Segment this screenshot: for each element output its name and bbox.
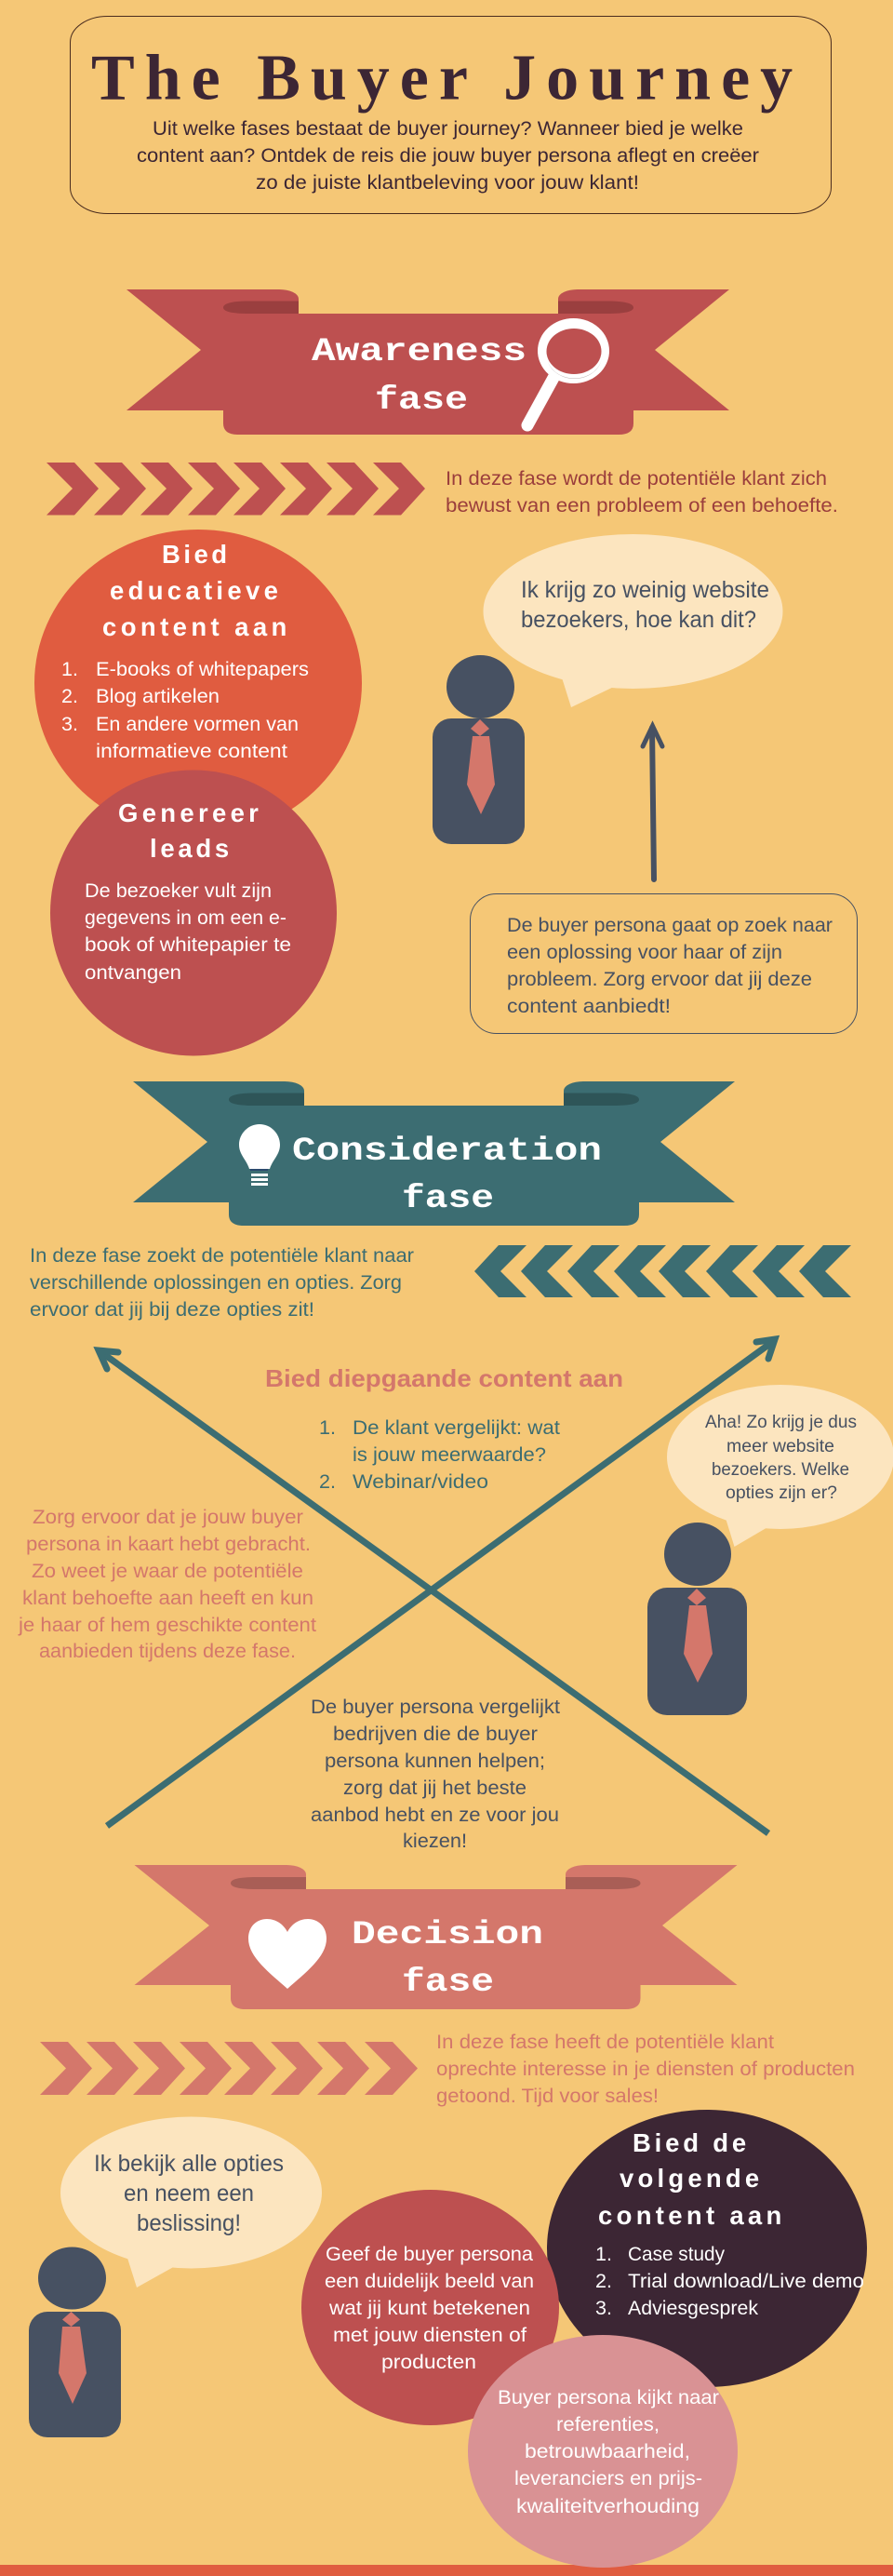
- heading: next content: Bied de: [633, 2128, 750, 2157]
- list: content types: [61, 658, 309, 762]
- panel: educational content circle: [34, 530, 362, 837]
- panel: awareness note: probleem. Zorg ervoor dat jij deze: [507, 968, 812, 990]
- panel: decision ribbon: [134, 1865, 737, 2009]
- text: comparison note: zorg dat jij het beste: [343, 1777, 526, 1799]
- heading: generate leads: leads: [150, 834, 233, 863]
- panel: clear picture circle: wat jij kunt betekenen: [328, 2297, 530, 2319]
- list: deep content: is jouw meerwaarde?: [353, 1443, 546, 1466]
- heading: educational content: Bied: [162, 540, 231, 569]
- list: content types: Blog artikelen: [96, 685, 220, 707]
- speech bubble: consideration: bezoekers. Welke: [712, 1460, 849, 1480]
- text: comparison note: kiezen!: [403, 1830, 467, 1852]
- panel: references circle: referenties,: [556, 2413, 660, 2435]
- icon: heart: [248, 1919, 327, 1989]
- footer bar: [0, 2565, 893, 2576]
- list: next content: Adviesgesprek: [628, 2297, 758, 2319]
- panel: references circle: [468, 2335, 738, 2568]
- list: next content: Trial download/Live demo: [628, 2270, 864, 2292]
- text: consideration intro: In deze fase zoekt de potentiële klant naar: [30, 1244, 414, 1267]
- text: awareness intro: In deze fase wordt de potentiële klant zich: [446, 467, 827, 490]
- panel: clear picture circle: met jouw diensten of: [333, 2324, 526, 2346]
- text: leads body: [85, 879, 291, 984]
- text: persona advice: je haar of hem geschikte content: [18, 1614, 316, 1636]
- list: next content: 2.: [595, 2270, 612, 2292]
- speech bubble: consideration: [667, 1385, 893, 1547]
- intro text: zo de juiste klantbeleving voor jouw klant!: [256, 171, 639, 194]
- icon: magnifier: [527, 318, 609, 425]
- text: decision intro: getoond. Tijd voor sales!: [436, 2085, 659, 2107]
- text: consideration intro: verschillende oplossingen en opties. Zorg: [30, 1271, 402, 1294]
- title: The Buyer Journey: [91, 43, 803, 114]
- heading: generate leads: Genereer: [118, 798, 262, 827]
- panel: awareness ribbon: [127, 289, 729, 435]
- list: content types: 3.: [61, 713, 78, 735]
- panel: awareness note: content aanbiedt!: [507, 995, 671, 1017]
- list: deep content: [319, 1416, 560, 1493]
- arrow: up to persona: [643, 726, 662, 879]
- panel: header box: [71, 17, 832, 214]
- panel: consideration ribbon: [133, 1081, 735, 1226]
- list: content types: En andere vormen van: [96, 713, 299, 735]
- speech bubble: consideration: Aha! Zo krijg je dus: [705, 1413, 857, 1432]
- list: deep content: De klant vergelijkt: wat: [353, 1416, 560, 1439]
- text: persona advice: aanbieden tijdens deze fase.: [39, 1640, 296, 1662]
- heading: next content: [598, 2128, 786, 2230]
- list: content types: informatieve content: [96, 740, 287, 762]
- speech bubble: decision: Ik bekijk alle opties: [94, 2151, 284, 2177]
- text: persona advice: persona in kaart hebt gebracht.: [26, 1533, 311, 1555]
- heading: consideration fase: Consideration: [292, 1133, 602, 1170]
- intro text: content aan? Ontdek de reis die jouw buyer persona aflegt en creëer: [137, 144, 759, 167]
- heading: decision fase: Decision: [352, 1916, 543, 1953]
- heading: consideration fase: [292, 1133, 602, 1217]
- speech bubble: decision: [60, 2116, 322, 2288]
- heading: next content: volgende: [620, 2164, 763, 2193]
- intro text: Uit welke fases bestaat de buyer journey? Wanneer bied je welke: [153, 117, 743, 140]
- speech bubble: awareness: [484, 534, 783, 707]
- list: next content: [595, 2243, 864, 2319]
- heading: educational content: educatieve: [110, 576, 282, 605]
- text: decision intro: oprechte interesse in je diensten of producten: [436, 2058, 855, 2080]
- text: consideration intro: ervoor dat jij bij deze opties zit!: [30, 1298, 314, 1321]
- text: awareness intro: [446, 467, 838, 517]
- speech bubble: awareness: bezoekers, hoe kan dit?: [521, 607, 756, 633]
- text: consideration intro: [30, 1244, 414, 1321]
- text: comparison note: De buyer persona vergelijkt: [311, 1696, 560, 1718]
- panel: clear picture circle: Geef de buyer persona: [326, 2243, 533, 2265]
- heading: awareness fase: Awareness: [312, 333, 526, 370]
- text: persona advice: Zo weet je waar de potentiële: [32, 1560, 303, 1582]
- text: comparison note: persona kunnen helpen;: [325, 1750, 545, 1772]
- heading: consideration fase: fase: [402, 1180, 494, 1217]
- list: next content: 1.: [595, 2243, 612, 2265]
- panel: awareness note: [471, 893, 858, 1033]
- heading: decision fase: [352, 1916, 543, 2001]
- list: content types: 1.: [61, 658, 78, 680]
- text: decision intro: In deze fase heeft de potentiële klant: [436, 2031, 774, 2053]
- text: leads body: De bezoeker vult zijn: [85, 879, 272, 902]
- heading: educational content: [102, 540, 291, 641]
- list: deep content: 2.: [319, 1470, 336, 1493]
- panel: references circle: Buyer persona kijkt naar: [498, 2386, 719, 2408]
- text: leads body: gegevens in om een e-: [85, 906, 287, 929]
- text: persona advice: [18, 1506, 316, 1662]
- heading: deep content: Bied diepgaande content aan: [265, 1364, 623, 1392]
- speech bubble: decision: beslissing!: [137, 2210, 241, 2236]
- heading: generate leads: [118, 798, 262, 863]
- list: next content: 3.: [595, 2297, 612, 2319]
- icon: buyer persona 2: [647, 1523, 747, 1715]
- panel: clear picture circle: [301, 2190, 559, 2425]
- heading: decision fase: fase: [402, 1964, 494, 2001]
- icon: light bulb: [239, 1124, 280, 1186]
- list: deep content: Webinar/video: [353, 1470, 488, 1493]
- text: leads body: ontvangen: [85, 961, 181, 984]
- speech bubble: decision: en neem een: [124, 2180, 254, 2207]
- text: awareness intro: bewust van een probleem of een behoefte.: [446, 494, 838, 517]
- panel: awareness note: De buyer persona gaat op zoek naar: [507, 914, 833, 936]
- intro text: [137, 117, 759, 194]
- text: persona advice: klant behoefte aan heeft en kun: [22, 1587, 313, 1609]
- list: next content: Case study: [628, 2243, 725, 2265]
- panel: references circle: betrouwbaarheid,: [525, 2440, 690, 2462]
- heading: awareness fase: fase: [375, 382, 468, 419]
- heading: educational content: content aan: [102, 612, 291, 641]
- panel: clear picture circle: een duidelijk beeld van: [325, 2270, 534, 2292]
- chevrons: decision: [40, 2042, 418, 2095]
- panel: generate leads circle: [50, 771, 337, 1055]
- speech bubble: awareness: Ik krijg zo weinig website: [521, 577, 769, 603]
- heading: next content: content aan: [598, 2201, 786, 2230]
- text: leads body: book of whitepapier te: [85, 933, 291, 956]
- speech bubble: consideration: opties zijn er?: [726, 1483, 837, 1503]
- panel: references circle: kwaliteitverhouding: [516, 2495, 700, 2517]
- text: persona advice: Zorg ervoor dat je jouw buyer: [33, 1506, 303, 1528]
- panel: awareness note: een oplossing voor haar of zijn: [507, 941, 782, 963]
- text: comparison note: bedrijven die de buyer: [333, 1723, 538, 1745]
- panel: references circle: leveranciers en prijs-: [514, 2467, 702, 2489]
- icon: buyer persona 3: [29, 2247, 121, 2437]
- list: deep content: 1.: [319, 1416, 336, 1439]
- panel: clear picture circle: producten: [381, 2351, 476, 2373]
- chevrons: consideration: [474, 1245, 851, 1297]
- text: comparison note: [311, 1696, 560, 1852]
- list: content types: E-books of whitepapers: [96, 658, 309, 680]
- list: content types: 2.: [61, 685, 78, 707]
- text: comparison note: aanbod hebt en ze voor jou: [311, 1804, 559, 1826]
- text: decision intro: [436, 2031, 855, 2107]
- arrows: crossing X: [99, 1339, 775, 1833]
- chevrons: awareness: [47, 463, 425, 516]
- icon: buyer persona 1: [433, 655, 525, 844]
- speech bubble: consideration: meer website: [726, 1437, 834, 1456]
- panel: next content circle: [547, 2110, 867, 2387]
- heading: awareness fase: [312, 333, 526, 419]
